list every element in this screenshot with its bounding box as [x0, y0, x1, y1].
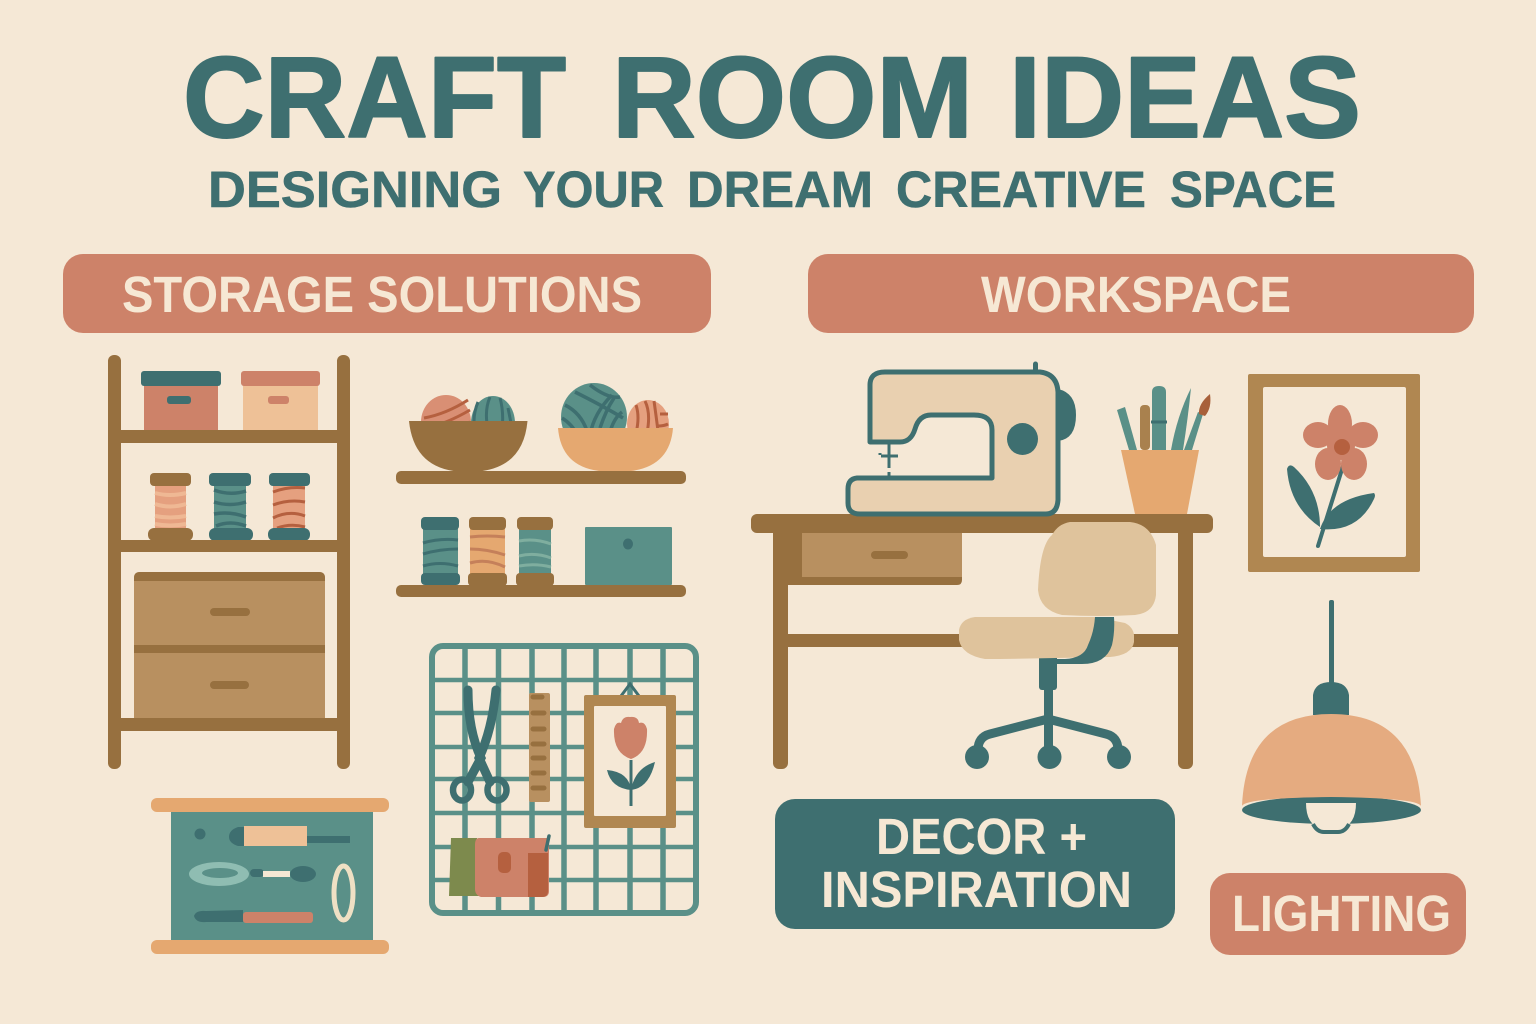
heading: storage solutions: STORAGE SOLUTIONS [122, 266, 642, 323]
label: decor + inspiration: DECOR + [876, 808, 1087, 865]
lower shelf [396, 585, 686, 597]
yarn ball salmon [421, 395, 471, 449]
icon: peach bowl [558, 428, 673, 471]
icon: thread spool coral [268, 473, 310, 541]
desk [751, 514, 1213, 769]
icon: brown bowl [409, 421, 528, 471]
heading: workspace: WORKSPACE [981, 266, 1291, 323]
yarn ball teal [471, 396, 515, 450]
desk drawer [788, 533, 962, 585]
title: IDEAS [1009, 34, 1361, 162]
subtitle: YOUR [523, 161, 664, 218]
icon: brush tool [194, 910, 313, 923]
upper shelf [396, 471, 686, 484]
yarn ball large teal [561, 383, 627, 451]
heading: workspace [808, 254, 1474, 333]
icon: teal box [585, 527, 672, 585]
icon: craft knife [229, 826, 350, 846]
icon: teal lidded box [141, 371, 221, 430]
icon: spool teal [421, 517, 460, 585]
subtitle: DREAM [687, 161, 873, 218]
icon: pencil cup [1117, 386, 1210, 514]
icon: elastic ring [334, 866, 353, 920]
yarn ball coral [627, 400, 669, 448]
subtitle: SPACE [1170, 161, 1336, 218]
icon: needle threader [189, 862, 316, 886]
subtitle [208, 161, 1336, 218]
desk legs and crossbar [773, 525, 1193, 769]
title: CRAFT [183, 34, 566, 162]
title: ROOM [612, 34, 973, 162]
subtitle: CREATIVE [896, 161, 1146, 218]
icon: framed tulip [584, 684, 676, 828]
label: decor + inspiration [775, 799, 1175, 929]
icon: peach lidded box [241, 371, 320, 430]
icon: framed flower [1248, 374, 1420, 572]
icon: storage pouches [449, 836, 549, 897]
icon: dot [194, 828, 206, 840]
wall shelves [396, 383, 686, 597]
icon: thread spool salmon [148, 473, 193, 541]
desk top [751, 514, 1213, 533]
subtitle: DESIGNING [208, 161, 502, 218]
shelving unit [108, 355, 350, 769]
label: decor + inspiration: INSPIRATION [821, 861, 1132, 918]
title [183, 34, 1361, 162]
label: lighting [1210, 873, 1466, 955]
tool tray [151, 798, 389, 954]
icon: thread spool teal [209, 473, 253, 541]
pegboard [431, 645, 696, 914]
icon: spool peach [468, 517, 507, 586]
icon: ruler [529, 693, 550, 802]
heading: storage solutions [63, 254, 711, 333]
icon: pendant lamp [1242, 600, 1421, 832]
icon: office chair [959, 522, 1156, 769]
icon: two-drawer cabinet [134, 572, 325, 718]
shelving frame [108, 355, 350, 769]
icon: spool light teal [516, 517, 554, 586]
icon: scissors [453, 690, 506, 800]
icon: sewing machine [848, 364, 1076, 514]
label: lighting: LIGHTING [1232, 885, 1451, 942]
